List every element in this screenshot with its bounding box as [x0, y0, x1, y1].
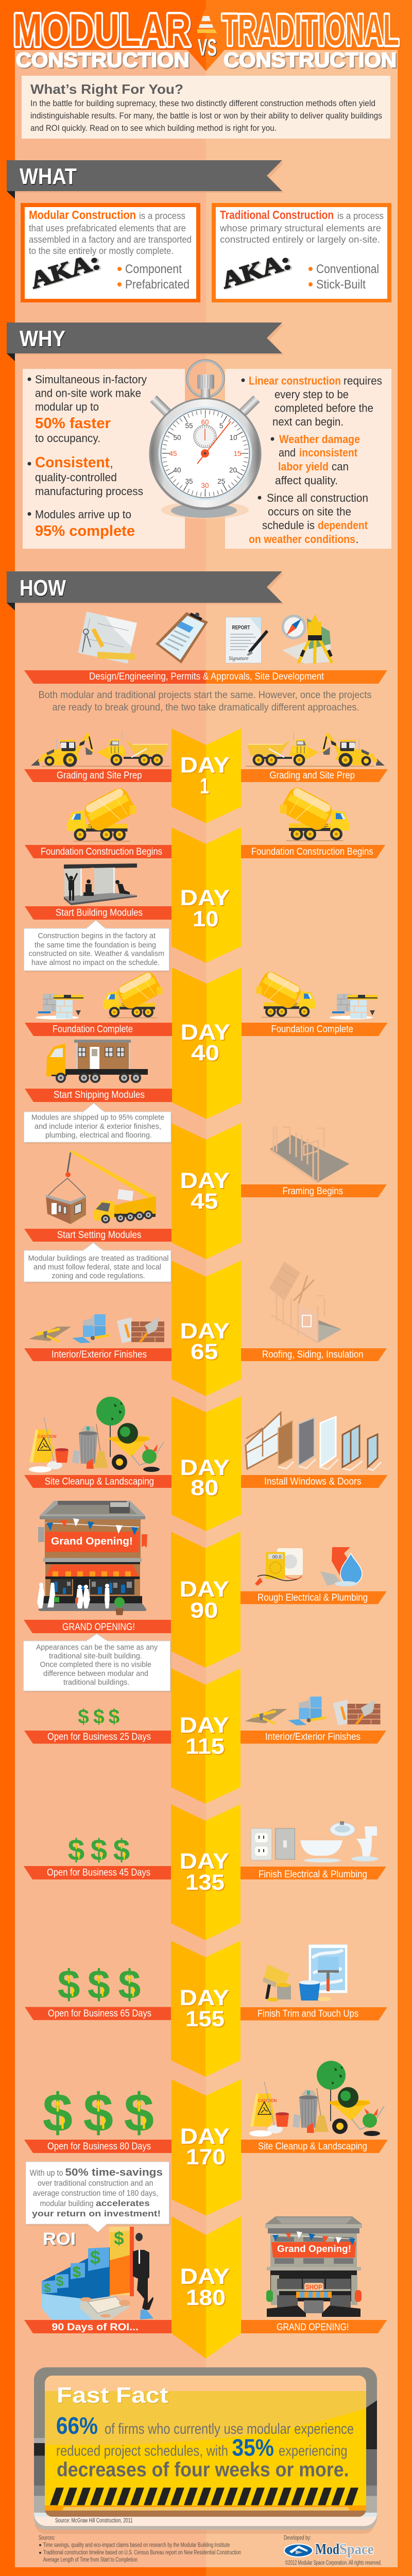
panel: traditional drawbacks: occurs on site the — [268, 505, 351, 518]
day 180 marker: DAY — [180, 2264, 230, 2289]
panel: modular benefits: manufacturing process — [35, 485, 143, 498]
callout: factory construction: constructed on site. Weather & vandalism — [29, 950, 164, 958]
vs: VS — [198, 34, 217, 61]
fact text: experiencing — [279, 2443, 347, 2460]
illustration: cement mixer day 40 left — [103, 970, 163, 1018]
illustration: windows and doors — [246, 1413, 381, 1470]
intro text: and ROI quickly. Read on to see which building method is right for you. — [30, 123, 277, 133]
callout: appearances: traditional buildings. — [63, 1679, 130, 1687]
illustration: finished modular shop: Grand Opening! — [51, 1536, 133, 1547]
label: grading right: Grading and Site Prep — [270, 770, 355, 781]
callout: appearances: traditional site-built building. — [49, 1652, 142, 1660]
icon: stopwatch: 50 — [173, 434, 181, 442]
label: finishes right — [241, 1731, 386, 1743]
callout: shipping: and include interior & exterior finishes, — [35, 1123, 161, 1131]
label: open 80 days: Open for Business 80 Days — [47, 2141, 151, 2152]
callout: time savings: modular building — [40, 2199, 94, 2208]
label: finish electrical: Finish Electrical & Plumbing — [259, 1869, 367, 1880]
panel: modular benefits: Simultaneous in-factory — [35, 373, 147, 386]
ribbon: how: HOW — [20, 575, 66, 601]
day 45 marker — [171, 1123, 241, 1259]
panel: modular benefits: Modules arrive up to — [35, 508, 131, 521]
day 80 marker: DAY — [180, 1455, 230, 1480]
callout: time savings: over traditional construction and an — [38, 2179, 153, 2188]
label: finishes right: Interior/Exterior Finishes — [265, 1732, 360, 1742]
day 45 marker: DAY — [180, 1168, 230, 1193]
label: windows and doors: Install Windows & Doors — [264, 1477, 362, 1487]
panel: modular benefits — [23, 369, 185, 549]
callout: appearances — [23, 1634, 171, 1692]
ribbon: why — [7, 323, 284, 361]
panel: traditional definition: whose primary structural elements are — [219, 223, 381, 233]
day 65 marker: DAY — [180, 1319, 230, 1344]
callout: regulations — [24, 1243, 172, 1283]
illustration: site cleanup left — [29, 1397, 164, 1472]
icon: stopwatch: 25 — [217, 478, 225, 485]
aka list: Component — [125, 262, 182, 276]
illustration: trim and touch ups — [263, 1944, 347, 2002]
illustration: framing — [269, 1126, 349, 1182]
panel: modular definition: Modular Construction — [29, 208, 136, 222]
icon: stopwatch: 35 — [185, 478, 193, 485]
panel: modular definition: is a process — [139, 210, 185, 221]
sources: Traditional construction timeline based on U.S. Census Bureau report on New Residential Construction — [43, 2550, 241, 2556]
panel: modular benefits: to occupancy. — [35, 432, 100, 445]
label: foundation complete right: Foundation Complete — [271, 1024, 353, 1035]
ribbon: what: WHAT — [20, 164, 77, 189]
label: finishes left — [24, 1348, 171, 1361]
panel: traditional drawbacks: and — [279, 446, 296, 459]
panel: traditional drawbacks: completed before the — [274, 402, 373, 415]
label: finish trim — [241, 2007, 387, 2021]
illustration: cement mixer left — [67, 785, 137, 842]
aka stamp: AKA: — [218, 247, 294, 294]
callout: appearances: difference between modular and — [43, 1670, 148, 1678]
callout: appearances: Appearances can be the same as any — [36, 1643, 158, 1652]
label: grading left — [24, 769, 171, 782]
fact text: reduced project schedules, with — [56, 2443, 228, 2460]
panel: intro — [22, 76, 390, 139]
label: open 80 days — [24, 2140, 171, 2153]
illustration: dollars 80 days: $ — [43, 2083, 73, 2143]
illustration: dollars 25 days — [78, 1706, 120, 1728]
icon: report: Signature — [229, 656, 249, 662]
label: grand opening left: GRAND OPENING! — [62, 1622, 135, 1633]
illustration: module on truck — [46, 1040, 148, 1083]
label: open 45 days — [24, 1866, 171, 1879]
day 155 marker: DAY — [179, 1986, 229, 2010]
panel: modular benefits: and on-site work make — [35, 386, 141, 400]
sources — [39, 2535, 241, 2563]
icon: stopwatch: 20 — [229, 466, 237, 474]
heading: what's right for you: What’s Right For You? — [30, 81, 183, 97]
label: cleanup right — [241, 2140, 388, 2153]
label: foundation complete left: Foundation Complete — [53, 1024, 133, 1035]
ribbon: why: WHY — [20, 326, 65, 351]
day 40 marker: DAY — [180, 1020, 230, 1045]
panel: modular benefits: Consistent — [35, 454, 110, 471]
illustration: roi stairs and businessman: $ — [114, 2229, 124, 2249]
callout: time savings: your return on investment! — [32, 2209, 161, 2218]
label: grading right — [241, 769, 388, 782]
day 135 marker: 135 — [185, 1870, 225, 1895]
panel: traditional drawbacks: on weather conditions — [249, 533, 355, 546]
banner: pre-construction: Design/Engineering, Permits & Approvals, Site Development — [89, 671, 324, 682]
day 10 marker: 10 — [193, 907, 218, 931]
panel: traditional definition: constructed entirely or largely on-site. — [220, 234, 380, 245]
label: foundation complete left — [25, 1023, 172, 1036]
label: framing begins: Framing Begins — [282, 1186, 343, 1197]
label: start setting modules: Start Setting Modules — [57, 1230, 141, 1241]
icon: stopwatch: 60 — [201, 418, 209, 426]
label: foundation left — [25, 845, 171, 858]
label: open 65 days — [25, 2007, 171, 2020]
illustration: dollars 65 days: $ — [88, 1961, 110, 2007]
day 155 marker: 155 — [185, 2007, 225, 2031]
panel: modular definition: that uses prefabricated elements that are — [29, 223, 186, 233]
label: finish trim: Finish Trim and Touch Ups — [258, 2008, 358, 2020]
sources: Average Length of Time from Start to Completion — [43, 2557, 138, 2563]
label: finishes left: Interior/Exterior Finishes — [52, 1349, 147, 1360]
day 115 marker: DAY — [179, 1713, 229, 1738]
day 1 marker: DAY — [180, 753, 230, 778]
illustration: finishes right — [245, 1697, 380, 1725]
intro text — [30, 98, 382, 133]
illustration: dollars 45 days: $ — [91, 1834, 107, 1867]
illustration: roi stairs and businessman: $ — [73, 2264, 81, 2281]
icon: report: REPORT — [232, 624, 250, 631]
logo: modspace — [284, 2541, 374, 2557]
panel: traditional drawbacks — [225, 369, 391, 549]
panel: traditional drawbacks: every step to be — [274, 388, 349, 401]
illustration: roi stairs and businessman — [42, 2227, 153, 2320]
text: both projects start the same: Both modular and traditional projects start the same. However, once the projects — [38, 689, 372, 701]
illustration: foundation bricks right — [330, 994, 377, 1019]
icon: stopwatch: 10 — [229, 434, 237, 442]
icon: traffic cone — [197, 10, 217, 33]
callout: time savings: 50% time-savings — [65, 2167, 163, 2178]
callout: shipping: plumbing, electrical and flooring. — [45, 1131, 152, 1140]
illustration: rough electrical and plumbing — [255, 1547, 362, 1586]
day 115 marker — [171, 1668, 241, 1804]
icon: stopwatch: 40 — [173, 466, 181, 474]
callout: time savings: accelerates — [96, 2199, 150, 2208]
label: start setting modules — [24, 1229, 171, 1242]
day 10 marker — [171, 827, 241, 963]
panel: traditional drawbacks: labor yield — [278, 460, 329, 473]
callout: factory construction: have almost no impact on the schedule. — [31, 959, 160, 967]
panel: traditional drawbacks: Weather damage — [279, 433, 360, 446]
callout: shipping — [24, 1103, 172, 1144]
label: start shipping modules — [25, 1089, 172, 1102]
day 1 marker: 1 — [200, 774, 209, 799]
illustration: dollars 65 days: $ — [58, 1961, 80, 2007]
heading: fast fact: Fast Fact — [57, 2383, 168, 2408]
panel: traditional drawbacks: can — [332, 460, 349, 473]
label: grand opening right — [241, 2320, 387, 2333]
fact text: 66% — [56, 2412, 98, 2439]
panel: traditional drawbacks: affect quality. — [275, 474, 338, 487]
illustration: finishes left — [29, 1314, 164, 1343]
illustration: dollars 80 days: $ — [83, 2083, 113, 2143]
label: start shipping modules: Start Shipping Modules — [54, 1090, 145, 1100]
panel: modular definition: assembled in a factory and are transported — [29, 234, 192, 245]
fact text: decreases of four weeks or more. — [57, 2459, 349, 2481]
aka list: Stick-Built — [316, 278, 366, 292]
label: open 45 days: Open for Business 45 Days — [47, 1868, 150, 1878]
panel: traditional definition — [212, 203, 391, 302]
label: cleanup right: Site Cleanup & Landscaping — [258, 2141, 367, 2152]
callout: regulations: zoning and code regulations. — [52, 1272, 145, 1280]
callout: appearances: Once completed there is no visible — [40, 1661, 151, 1669]
label: foundation right: Foundation Construction Begins — [251, 846, 373, 857]
panel: modular definition: to the site entirely or mostly complete. — [29, 245, 174, 256]
illustration: roi stairs and businessman: $ — [44, 2281, 51, 2295]
label: grand opening left — [24, 1620, 171, 1633]
label: rough electrical: Rough Electrical & Plumbing — [258, 1592, 368, 1603]
callout: time savings — [26, 2162, 170, 2232]
credit and logo: Developed by: — [284, 2535, 311, 2541]
panel: modular benefits: 50% faster — [35, 415, 111, 432]
panel: modular benefits: 95% complete — [35, 523, 135, 539]
day 170 marker: 170 — [186, 2145, 226, 2170]
illustration: roi stairs and businessman: $ — [56, 2274, 63, 2289]
illustration: dollars 65 days — [58, 1961, 141, 2007]
label: open 25 days — [24, 1731, 171, 1743]
title: modular: MODULAR — [13, 4, 191, 56]
title: construction left: CONSTRUCTION — [16, 49, 190, 72]
panel: traditional drawbacks: Linear construction — [249, 374, 341, 387]
panel: traditional definition: is a process — [337, 210, 384, 221]
icon: stopwatch: 45 — [169, 450, 177, 457]
illustration: dollars 45 days: $ — [68, 1834, 84, 1867]
illustration: site cleanup right — [249, 2061, 384, 2137]
icon: report — [226, 617, 267, 663]
label: grand opening right: GRAND OPENING! — [277, 2322, 349, 2333]
ribbon: how — [7, 571, 284, 611]
intro text: In the battle for building supremacy, these two distinctly different construction methods often yield — [30, 98, 375, 108]
roi label: ROI — [43, 2229, 76, 2249]
panel: traditional drawbacks: . — [355, 533, 359, 546]
ribbon: what — [7, 160, 284, 199]
day 170 marker — [171, 2079, 241, 2215]
icon: surveying tools — [281, 614, 332, 664]
day 155 marker — [171, 1941, 241, 2077]
callout: time savings: With up to — [30, 2168, 63, 2178]
illustration: dollars 45 days: $ — [113, 1834, 130, 1867]
logo: modspace: Space — [339, 2541, 374, 2557]
aka stamp: AKA: — [27, 247, 103, 294]
illustration: roi stairs and businessman: $ — [90, 2247, 100, 2268]
label: framing begins — [241, 1184, 387, 1197]
panel: fast fact — [34, 2367, 377, 2534]
day 180 marker — [171, 2216, 241, 2359]
day 45 marker: 45 — [191, 1189, 218, 1214]
day 90 marker: DAY — [179, 1577, 229, 1602]
panel: modular benefits: , — [110, 457, 113, 470]
label: roofing: Roofing, Siding, Insulation — [262, 1349, 364, 1360]
callout: factory construction — [24, 920, 170, 972]
day 65 marker — [171, 1261, 241, 1396]
icon: stopwatch: 55 — [185, 422, 193, 430]
panel: traditional drawbacks: next can begin. — [272, 415, 344, 428]
callout: factory construction: Construction begins in the factory at — [38, 932, 156, 940]
label: 90 days of roi — [24, 2320, 171, 2333]
icon: stopwatch: 30 — [201, 482, 209, 489]
intro text: indistinguishable results. For many, the battle is lost or won by their ability to deliver quality buildings — [30, 111, 382, 121]
logo: modspace: Mod — [315, 2541, 339, 2557]
panel: traditional drawbacks: Since all construction — [267, 492, 368, 504]
sources: Time savings, quality and eco-impact claims based on research by the Modular Building Institute — [43, 2542, 230, 2548]
icon: stopwatch — [149, 360, 262, 519]
illustration: dollars 65 days: $ — [118, 1961, 141, 2007]
aka list — [117, 262, 190, 292]
day 40 marker — [172, 968, 242, 1119]
illustration: traditional shop complete: SHOP — [305, 2283, 322, 2291]
aka list: Prefabricated — [125, 278, 190, 292]
day 180 marker: 180 — [186, 2285, 226, 2310]
label: cleanup left: Site Cleanup & Landscaping — [45, 1477, 154, 1487]
illustration: dollars 25 days: $ — [93, 1706, 105, 1728]
illustration: dollars 25 days: $ — [78, 1706, 89, 1728]
illustration: rough electrical and plumbing: 00.0 — [272, 1554, 282, 1560]
day 1 marker — [171, 728, 241, 823]
illustration: grading equipment left — [31, 732, 170, 767]
day 80 marker: 80 — [191, 1476, 218, 1500]
icon: stopwatch: 15 — [233, 450, 242, 457]
illustration: dollars 25 days: $ — [109, 1706, 120, 1728]
label: windows and doors — [241, 1475, 387, 1488]
label: 90 days of roi: 90 Days of ROI... — [52, 2322, 139, 2333]
illustration: dollars 80 days: $ — [124, 2083, 154, 2143]
illustration: dollars 45 days — [68, 1834, 130, 1867]
panel: traditional drawbacks: schedule is — [262, 519, 315, 532]
illustration: cement mixer day 40 right — [255, 969, 316, 1018]
aka list — [308, 262, 379, 292]
callout: regulations: Modular buildings are treated as traditional — [28, 1255, 168, 1263]
label: start building modules — [25, 906, 171, 920]
day 65 marker: 65 — [191, 1340, 218, 1364]
banner: pre-construction — [24, 670, 387, 684]
illustration: roofing and siding — [269, 1262, 341, 1343]
callout: shipping: Modules are shipped up to 95% complete — [31, 1114, 164, 1122]
day 40 marker: 40 — [191, 1041, 219, 1065]
callout: regulations: and must follow federal, state and local — [33, 1263, 161, 1272]
text: both projects start the same: are ready to break ground, the two take dramatically different approaches. — [53, 702, 359, 713]
illustration: traditional shop complete — [265, 2216, 362, 2317]
panel: modular benefits: quality-controlled — [35, 471, 117, 484]
label: finish electrical — [241, 1867, 386, 1880]
panel: modular definition — [21, 203, 200, 302]
icon: clipboard — [156, 612, 208, 664]
icon: stopwatch: 5 — [219, 422, 223, 430]
label: open 65 days: Open for Business 65 Days — [48, 2008, 151, 2019]
day 90 marker — [171, 1532, 241, 1668]
aka list: Conventional — [316, 262, 379, 276]
callout: factory construction: the same time the foundation is being — [35, 941, 156, 950]
text: both projects start the same — [38, 689, 372, 713]
panel: traditional drawbacks: dependent — [318, 519, 368, 532]
fact text — [56, 2412, 354, 2481]
day 10 marker: DAY — [180, 886, 230, 910]
label: open 25 days: Open for Business 25 Days — [47, 1732, 151, 1742]
panel: traditional drawbacks: requires — [344, 374, 382, 387]
day 170 marker: DAY — [180, 2124, 230, 2149]
hazard stripes — [50, 2487, 358, 2505]
credit and logo — [284, 2535, 382, 2566]
day 90 marker: 90 — [190, 1598, 218, 1623]
illustration: factory workers building module — [64, 863, 137, 905]
illustration: foundation bricks left — [36, 994, 83, 1019]
title — [13, 4, 399, 72]
illustration: finish electrical and plumbing — [251, 1821, 378, 1862]
illustration: grading equipment right — [246, 732, 385, 767]
label: start building modules: Start Building Modules — [56, 908, 143, 918]
day 80 marker — [171, 1396, 241, 1531]
label: foundation complete right — [242, 1023, 387, 1036]
illustration: dollars 80 days — [43, 2083, 154, 2143]
day 135 marker — [171, 1804, 241, 1940]
label: roofing — [241, 1348, 387, 1361]
illustration: traditional shop complete: Grand Opening! — [277, 2244, 351, 2254]
panel: traditional definition: Traditional Construction — [220, 208, 334, 222]
day 135 marker: DAY — [179, 1849, 229, 1874]
illustration: finished modular shop — [37, 1501, 147, 1615]
title: construction right: CONSTRUCTION — [224, 49, 397, 72]
label: foundation left: Foundation Construction Begins — [41, 846, 162, 857]
day 115 marker: 115 — [185, 1734, 225, 1759]
panel: modular benefits: modular up to — [35, 400, 99, 413]
source: Source: McGraw Hill Construction, 2011 — [55, 2518, 133, 2524]
sources: Sources: — [39, 2535, 55, 2541]
fact text: 35% — [232, 2434, 274, 2461]
panel: traditional drawbacks: inconsistent — [299, 446, 358, 459]
label: grading left: Grading and Site Prep — [57, 770, 142, 781]
illustration: cement mixer right — [279, 785, 350, 841]
illustration: crane setting module — [46, 1150, 156, 1224]
callout: time savings: average construction time of 180 days, — [33, 2189, 158, 2198]
icon: blueprint — [78, 612, 137, 664]
fact text: of firms who currently use modular experience — [105, 2421, 354, 2437]
